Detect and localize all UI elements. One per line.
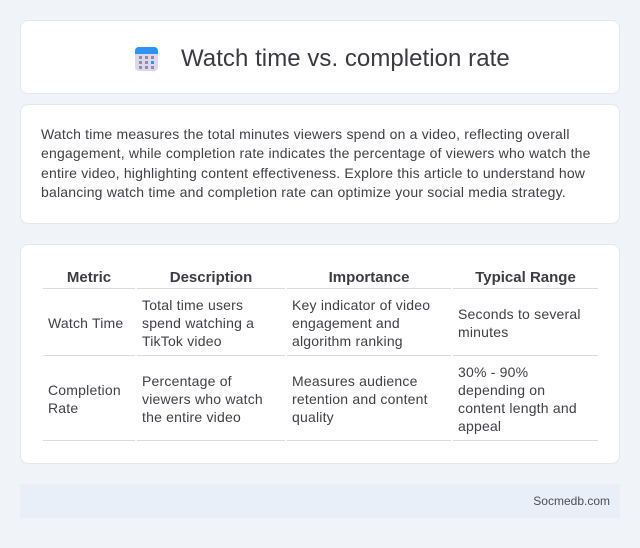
footer bar — [20, 484, 620, 518]
table header — [67, 269, 576, 286]
row: completion rate: Rate — [48, 400, 78, 416]
intro text — [41, 126, 591, 200]
row: watch time: TikTok video — [142, 333, 222, 349]
row: watch time: Total time users — [142, 297, 243, 313]
row: completion rate: content length and — [458, 400, 577, 416]
row: completion rate: 30% - 90% — [458, 364, 528, 380]
table header: Importance — [329, 269, 409, 286]
panel: introduction — [20, 104, 620, 224]
row: completion rate: Completion — [48, 382, 121, 398]
row: completion rate: appeal — [458, 418, 501, 434]
intro text: balancing watch time and completion rate can optimize your social media strategy. — [41, 184, 566, 200]
intro text: Watch time measures the total minutes viewers spend on a video, reflecting overall — [41, 126, 570, 142]
table header: Description — [170, 269, 252, 286]
row: completion rate: Percentage of — [142, 373, 232, 389]
table header: Metric — [67, 269, 111, 286]
row: completion rate: quality — [292, 409, 334, 425]
row: watch time: Seconds to several — [458, 306, 581, 322]
footer credit: Socmedb.com — [533, 494, 610, 508]
panel: metrics table — [20, 244, 620, 464]
row: completion rate: viewers who watch — [142, 391, 263, 407]
row: watch time: Watch Time — [48, 315, 123, 331]
row: completion rate: Measures audience — [292, 373, 418, 389]
intro text: entire video, highlighting content effectiveness. Explore this article to understand how — [41, 165, 585, 181]
row: watch time: engagement and — [292, 315, 400, 331]
row: watch time: spend watching a — [142, 315, 254, 331]
panel: title card — [20, 20, 620, 94]
row: completion rate: depending on — [458, 382, 545, 398]
row: watch time: Key indicator of video — [292, 297, 430, 313]
row: watch time: algorithm ranking — [292, 333, 403, 349]
row: watch time — [48, 297, 581, 349]
icon: calendar — [135, 47, 158, 71]
row: watch time: minutes — [458, 324, 508, 340]
title: Watch time vs. completion rate — [181, 45, 510, 72]
row: completion rate: retention and content — [292, 391, 428, 407]
table header: Typical Range — [475, 269, 576, 286]
row: completion rate — [48, 364, 577, 434]
intro text: engagement, while completion rate indicates the percentage of viewers who watch the — [41, 145, 591, 161]
row: completion rate: the entire video — [142, 409, 241, 425]
